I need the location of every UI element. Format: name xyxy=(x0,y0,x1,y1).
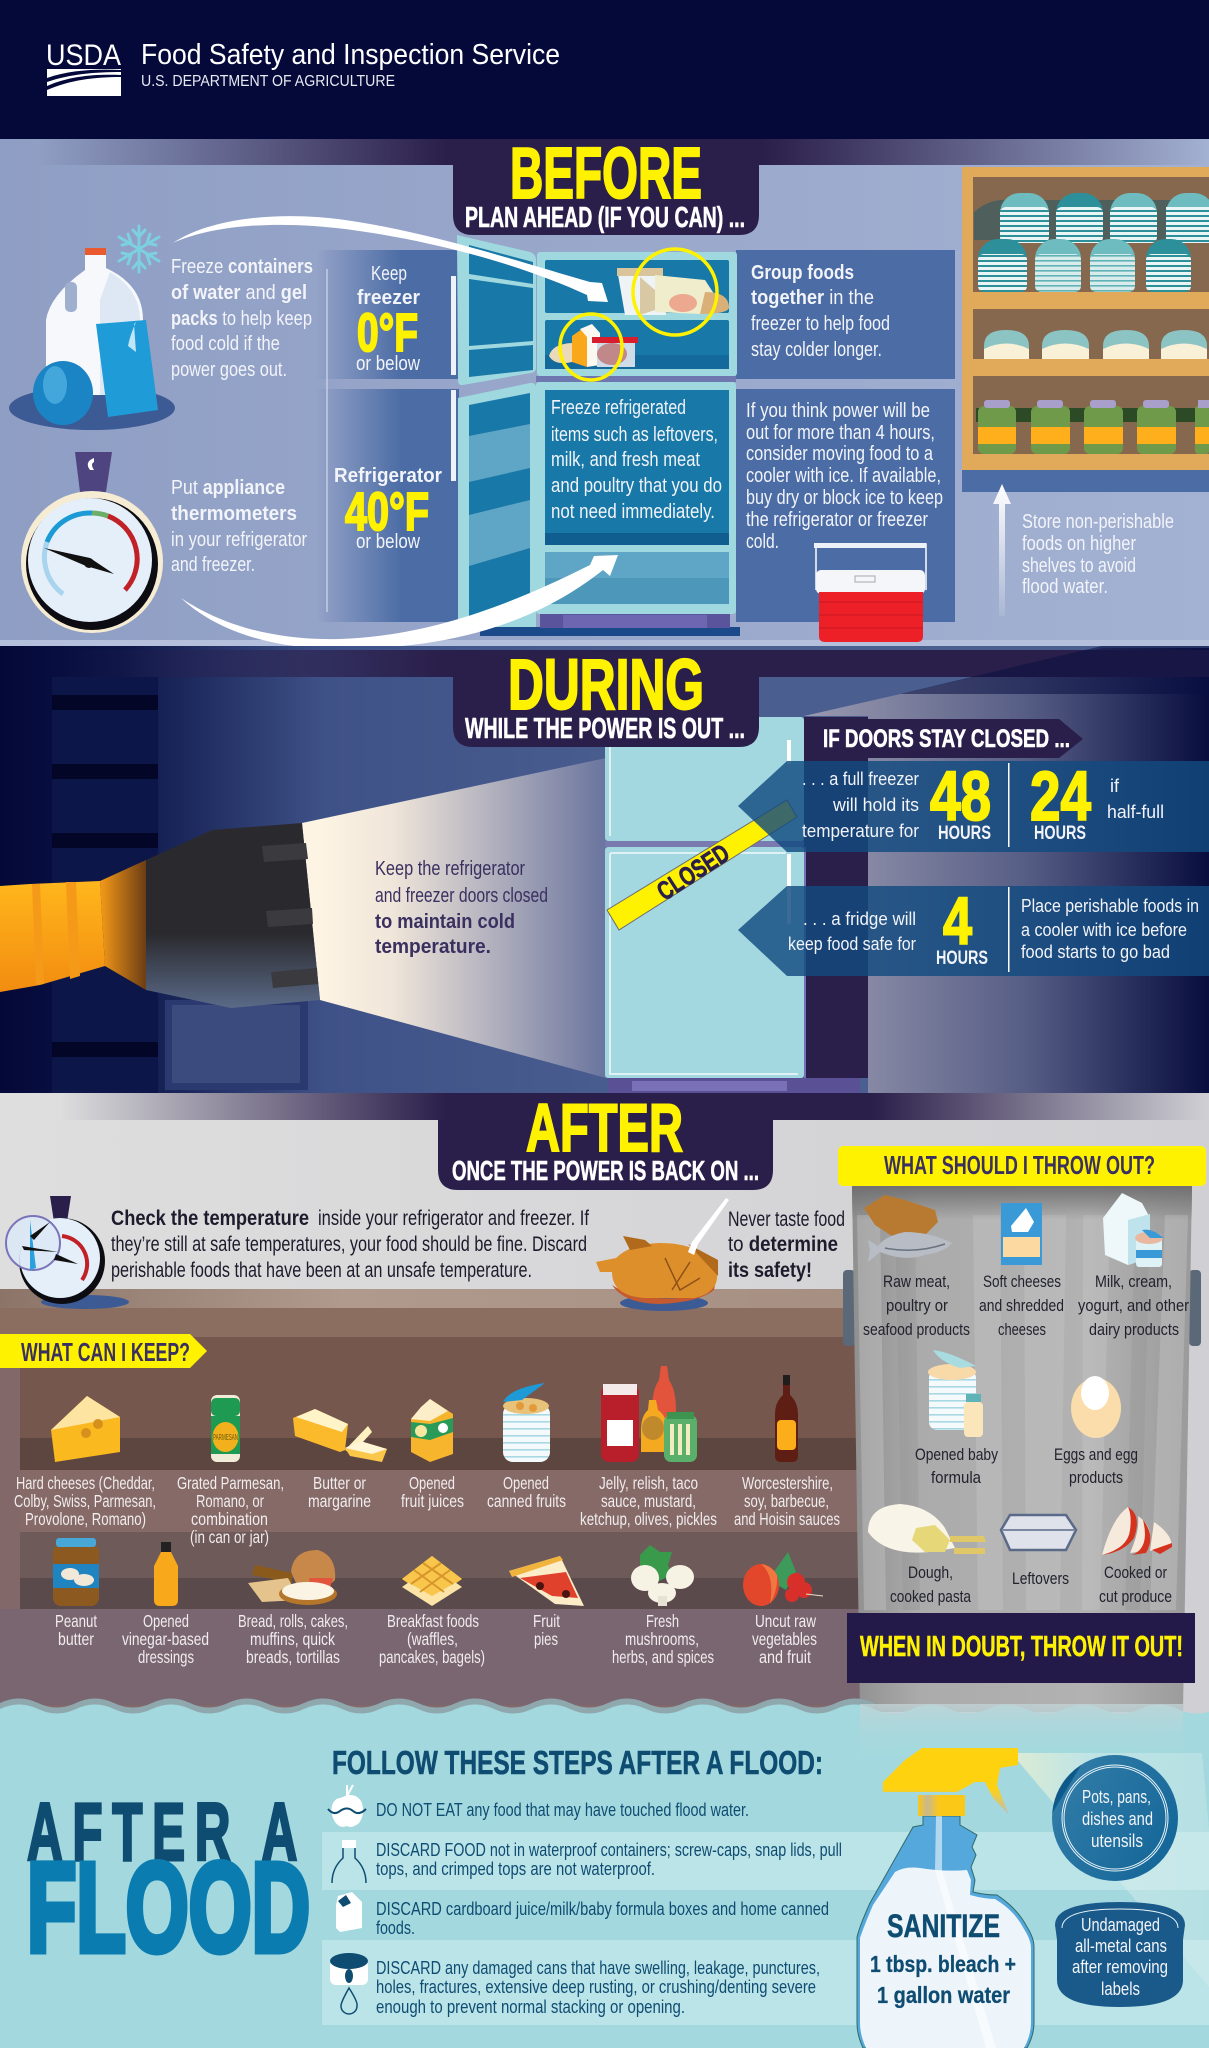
text: throw out food labels: Eggs and egg xyxy=(1054,1446,1138,1464)
text: throw out food labels: and shredded xyxy=(979,1297,1064,1315)
text: throw out food labels: Leftovers xyxy=(1012,1570,1069,1588)
agency name: Food Safety and Inspection Service xyxy=(141,39,560,71)
icon: leftovers container xyxy=(1001,1515,1076,1550)
title: after a flood: AFTER A xyxy=(27,1787,307,1878)
icon: leaking can xyxy=(330,1953,368,2014)
text: throw out food labels: seafood products xyxy=(863,1321,970,1339)
text: second row food labels: vegetables xyxy=(752,1629,817,1649)
callout: freezer hold times: HOURS xyxy=(1034,823,1086,844)
icon: closed refrigerator xyxy=(605,717,868,1093)
icon: flashlight xyxy=(0,823,320,1008)
icon: apple in water xyxy=(328,1785,366,1827)
USDA logo: USDA xyxy=(46,39,121,72)
icon: breads xyxy=(248,1550,337,1605)
freezer temperature panel: Keep xyxy=(371,263,407,285)
callout: fridge hold time: food starts to go bad xyxy=(1021,942,1170,962)
title: before: PLAN AHEAD (IF YOU CAN) ... xyxy=(465,202,745,234)
icon: baby formula xyxy=(928,1350,983,1437)
icon: cut produce xyxy=(1102,1507,1172,1555)
text: appliance thermometers: and freezer. xyxy=(171,554,255,576)
icon: milk carton and yogurt xyxy=(1103,1193,1164,1267)
text: throw out food labels: formula xyxy=(931,1469,982,1487)
text: first row food labels: Hard cheeses (Cheddar, xyxy=(16,1473,155,1493)
heading: follow these steps: FOLLOW THESE STEPS AFTER A FLOOD: xyxy=(332,1744,823,1781)
icon: condiment jars xyxy=(601,1366,697,1462)
icon: egg xyxy=(1071,1376,1121,1438)
icon: open refrigerator xyxy=(457,235,740,636)
badge: pots and pans: Pots, pans, xyxy=(1082,1787,1151,1807)
text: second row food labels: Fresh xyxy=(646,1611,679,1631)
icon: water jug, gel pack, snowflake xyxy=(9,226,175,430)
text: freeze refrigerated items: items such as leftovers, xyxy=(551,424,718,446)
text: first row food labels: Butter or xyxy=(313,1473,366,1493)
text: store non-perishable xyxy=(1022,511,1174,598)
light beam xyxy=(302,758,606,1078)
badge: metal cans xyxy=(1055,1902,1185,2007)
callout: freezer hold times xyxy=(738,757,1209,852)
text: second row food labels: muffins, quick xyxy=(250,1629,335,1649)
icon: appliance thermometer xyxy=(21,452,163,633)
icon: dressing bottle xyxy=(154,1542,178,1606)
freezer temperature panel: freezer xyxy=(357,287,420,309)
panel: group foods: Group foods xyxy=(751,262,854,284)
jars xyxy=(976,400,1209,454)
icon: cooler xyxy=(814,543,926,642)
text: first row food labels: ketchup, olives, pickles xyxy=(580,1509,717,1529)
text: first row food labels: margarine xyxy=(308,1491,371,1511)
icon: carton xyxy=(336,1892,362,1932)
closed tape: CLOSED xyxy=(651,838,735,906)
text: check the temperature: they’re still at safe temperatures, your food should be fine. Discard xyxy=(111,1233,587,1256)
text: first row food labels: canned fruits xyxy=(487,1491,566,1511)
title: after a flood: FLOOD xyxy=(27,1837,310,1978)
icon: shredded cheese bag xyxy=(1001,1203,1042,1265)
dark shelves xyxy=(52,677,308,1093)
header band xyxy=(0,0,1209,139)
text: throw out food labels: Cooked or xyxy=(1104,1564,1167,1582)
callout: fridge hold time: 4 xyxy=(943,884,972,959)
title: after a flood xyxy=(27,1787,310,1978)
text: first row food labels: soy, barbecue, xyxy=(744,1491,829,1511)
title: during xyxy=(453,646,759,747)
text: freeze containers: of water and gel xyxy=(171,282,307,304)
text: appliance thermometers: thermometers xyxy=(171,503,297,525)
arrow: move up xyxy=(993,484,1011,616)
text: discard cans: DISCARD any damaged cans that have swelling, leakage, punctures, xyxy=(376,1958,820,1978)
text: second row food labels: breads, tortillas xyxy=(246,1647,340,1667)
text: first row food labels: Provolone, Romano) xyxy=(25,1509,146,1529)
text: freeze refrigerated items xyxy=(551,397,722,523)
refrigerator temperature panel: Refrigerator xyxy=(334,465,442,487)
callout: freezer hold times: temperature for xyxy=(802,821,919,841)
title: before xyxy=(453,134,759,235)
text: never taste food: to determine xyxy=(728,1233,838,1256)
text: keep doors closed xyxy=(375,858,548,958)
text: throw out food labels: poultry or xyxy=(886,1297,948,1315)
text: second row food labels: Breakfast foods xyxy=(387,1611,479,1631)
USDA logo xyxy=(46,39,121,96)
badge: pots and pans xyxy=(1052,1755,1178,1881)
icon: thermometer with probe dial xyxy=(6,1196,129,1309)
text: discard food xyxy=(376,1840,842,1879)
text: first row food labels xyxy=(14,1473,840,1547)
text: discard cardboard xyxy=(376,1899,829,1938)
text: throw out food labels: cooked pasta xyxy=(890,1588,972,1606)
text: never taste food xyxy=(728,1208,845,1282)
shelves with food xyxy=(962,167,1209,492)
text: never taste food: Never taste food xyxy=(728,1208,845,1231)
text: second row food labels: Bread, rolls, cakes, xyxy=(238,1611,348,1631)
text: second row food labels: (waffles, xyxy=(407,1629,458,1649)
banner: what should I throw out xyxy=(838,1146,1206,1186)
panel: after xyxy=(0,1090,1209,1733)
banner: what can I keep xyxy=(0,1334,207,1368)
icon: fruit pie xyxy=(509,1556,584,1606)
text: second row food labels: Opened xyxy=(143,1611,189,1631)
badge: metal cans: all-metal cans xyxy=(1075,1936,1167,1956)
text: throw out food labels xyxy=(863,1273,1189,1606)
text: first row food labels: Opened xyxy=(503,1473,549,1493)
text: sanitize: 1 tbsp. bleach + xyxy=(870,1951,1016,1977)
freezer temperature panel: 0°F xyxy=(357,303,418,363)
icon: snowflake xyxy=(119,226,159,272)
text: discard food: tops, and crimped tops are not waterproof. xyxy=(376,1859,655,1879)
text: discard cans: enough to prevent normal stacking or opening. xyxy=(376,1997,685,2017)
text: first row food labels: Worcestershire, xyxy=(742,1473,833,1493)
text: freeze refrigerated items: milk, and fresh meat xyxy=(551,449,700,471)
trash can xyxy=(843,1185,1201,1712)
text: throw out food labels: Dough, xyxy=(908,1564,953,1582)
text: first row food labels: Grated Parmesan, xyxy=(177,1473,284,1493)
text: freeze containers: power goes out. xyxy=(171,359,287,381)
icon: bottle xyxy=(332,1840,366,1883)
callout: fridge hold time: keep food safe for xyxy=(788,934,916,954)
text: throw out food labels: yogurt, and other xyxy=(1078,1297,1189,1315)
banner: when in doubt xyxy=(847,1613,1195,1683)
panel: cooler advice: out for more than 4 hours, xyxy=(746,422,935,444)
panel: before xyxy=(0,134,1209,649)
text: throw out food labels: dairy products xyxy=(1089,1321,1179,1339)
panel: during xyxy=(0,646,1209,1093)
text: sanitize: 1 gallon water xyxy=(877,1982,1010,2008)
banner: what can I keep: WHAT CAN I KEEP? xyxy=(21,1337,190,1367)
panel: cooler advice: the refrigerator or freezer xyxy=(746,509,928,531)
arrow: to freezer xyxy=(173,216,608,302)
text: freeze containers: Freeze containers xyxy=(171,256,313,278)
badge: metal cans: Undamaged xyxy=(1081,1915,1160,1935)
text: first row food labels: combination xyxy=(191,1509,268,1529)
text: do not eat: DO NOT EAT any food that may have touched flood water. xyxy=(376,1800,749,1820)
text: second row food labels: vinegar-based xyxy=(122,1629,209,1649)
text: freeze containers: packs to help keep xyxy=(171,308,312,330)
icon: peanut butter jar xyxy=(53,1538,99,1606)
badge: pots and pans: dishes and xyxy=(1082,1809,1153,1829)
panel: cooler advice: consider moving food to a xyxy=(746,443,934,465)
callout: freezer hold times: will hold its xyxy=(832,795,919,815)
icon: parmesan shaker: PARMESAN xyxy=(213,1433,238,1442)
icon: opened can xyxy=(503,1383,550,1462)
panel: group foods: together in the xyxy=(751,287,874,309)
callout: fridge hold time xyxy=(738,884,1209,976)
icon: waffles xyxy=(402,1556,462,1606)
badge: metal cans: after removing xyxy=(1072,1957,1168,1977)
title: after: ONCE THE POWER IS BACK ON ... xyxy=(452,1155,759,1186)
text: second row food labels: mushrooms, xyxy=(625,1629,699,1649)
text: check the temperature: perishable foods that have been at an unsafe temperature. xyxy=(111,1259,532,1282)
plates xyxy=(974,193,1209,292)
text: appliance thermometers: in your refrigerator xyxy=(171,529,307,551)
text: freeze containers xyxy=(171,256,313,381)
callout: freezer hold times: if xyxy=(1110,776,1120,796)
spray mist xyxy=(1018,1753,1209,1987)
panel: group foods: freezer to help food xyxy=(751,313,890,335)
refrigerator temperature panel: or below xyxy=(356,531,420,553)
text: discard cardboard: DISCARD cardboard juice/milk/baby formula boxes and home canned xyxy=(376,1899,829,1919)
text: throw out food labels: Opened baby xyxy=(915,1446,999,1464)
text: second row food labels: Peanut xyxy=(55,1611,97,1631)
text: never taste food: its safety! xyxy=(728,1259,812,1282)
text: discard cans: holes, fractures, extensive deep rusting, or crushing/denting severe xyxy=(376,1977,816,1997)
title: after: AFTER xyxy=(526,1090,683,1166)
text: appliance thermometers: Put appliance xyxy=(171,477,285,499)
callout: freezer hold times: HOURS xyxy=(938,823,991,844)
arrow: to refrigerator xyxy=(181,555,618,649)
text: keep doors closed: Keep the refrigerator xyxy=(375,858,525,880)
text: store non-perishable: shelves to avoid xyxy=(1022,555,1136,577)
badge: metal cans: labels xyxy=(1101,1979,1140,1999)
icon: mushrooms and herbs xyxy=(631,1545,694,1606)
icon: juice carton xyxy=(411,1399,453,1462)
text: check the temperature: inside your refrigerator and freezer. If xyxy=(318,1207,589,1230)
closed tape xyxy=(607,800,797,930)
text: first row food labels: Romano, or xyxy=(196,1491,264,1511)
text: sanitize xyxy=(870,1908,1016,2008)
text: second row food labels: Uncut raw xyxy=(755,1611,816,1631)
callout: fridge hold time: . . . a fridge will xyxy=(803,909,916,929)
text: appliance thermometers xyxy=(171,477,307,576)
text: keep doors closed: to maintain cold xyxy=(375,911,515,933)
panel: cooler advice: cold. xyxy=(746,531,779,553)
text: first row food labels: fruit juices xyxy=(401,1491,464,1511)
counter and wall xyxy=(0,1289,860,1709)
icon: roast turkey and fork xyxy=(596,1198,729,1311)
text: keep doors closed: temperature. xyxy=(375,936,491,958)
icon: spray bottle xyxy=(857,1748,1034,2048)
icon: dough and pasta xyxy=(868,1504,986,1554)
text: store non-perishable: foods on higher xyxy=(1022,533,1136,555)
icon: vegetables and fruit xyxy=(743,1552,823,1606)
text: throw out food labels: products xyxy=(1069,1469,1123,1487)
callout: freezer hold times: 48 xyxy=(930,757,991,835)
icon: butter xyxy=(293,1409,387,1462)
icon: parmesan shaker xyxy=(211,1395,240,1462)
callout: freezer hold times: half-full xyxy=(1107,802,1164,822)
title: during: WHILE THE POWER IS OUT ... xyxy=(465,713,745,745)
text: second row food labels: pies xyxy=(534,1629,558,1649)
text: first row food labels: sauce, mustard, xyxy=(601,1491,696,1511)
panel: group foods: stay colder longer. xyxy=(751,339,882,361)
panel: cooler advice: If you think power will be xyxy=(746,400,930,422)
text: check the temperature: Check the temperature xyxy=(111,1207,309,1230)
title: after xyxy=(438,1090,773,1190)
callout: fridge hold time: a cooler with ice before xyxy=(1021,920,1187,940)
text: second row food labels: Fruit xyxy=(533,1611,560,1631)
callout: if doors stay closed xyxy=(804,719,1083,758)
panel: after a flood xyxy=(0,1698,1209,2048)
panel: cooler advice: buy dry or block ice to keep xyxy=(746,487,943,509)
text: keep doors closed: and freezer doors closed xyxy=(375,885,548,907)
text: second row food labels: pancakes, bagels) xyxy=(379,1647,485,1667)
title: during: DURING xyxy=(508,646,704,725)
text: throw out food labels: Soft cheeses xyxy=(983,1273,1061,1291)
text: first row food labels: (in can or jar) xyxy=(190,1527,269,1547)
text: freeze refrigerated items: and poultry that you do xyxy=(551,475,722,497)
text: first row food labels: and Hoisin sauces xyxy=(734,1509,840,1529)
text: check the temperature xyxy=(111,1207,589,1282)
text: freeze containers: food cold if the xyxy=(171,333,280,355)
highlight circles xyxy=(560,249,717,380)
text: second row food labels: and fruit xyxy=(759,1647,811,1667)
text: discard food: DISCARD FOOD not in waterproof containers; screw-caps, snap lids, pull xyxy=(376,1840,842,1860)
text: second row food labels: butter xyxy=(58,1629,94,1649)
panel: cooler advice xyxy=(736,389,955,622)
icon: raw poultry and fish xyxy=(864,1195,952,1262)
text: second row food labels: dressings xyxy=(138,1647,194,1667)
text: freeze refrigerated items: not need immediately. xyxy=(551,501,715,523)
text: throw out food labels: cut produce xyxy=(1099,1588,1172,1606)
bowls xyxy=(984,330,1207,359)
text: store non-perishable: flood water. xyxy=(1022,576,1108,598)
refrigerator temperature panel: 40°F xyxy=(345,482,429,542)
title: before: BEFORE xyxy=(510,134,702,214)
text: second row food labels xyxy=(55,1611,817,1667)
callout: if doors stay closed: IF DOORS STAY CLOSED ... xyxy=(823,725,1070,753)
text: first row food labels: Opened xyxy=(409,1473,455,1493)
icon: cheese wedge xyxy=(51,1396,120,1462)
text: throw out food labels: Raw meat, xyxy=(883,1273,950,1291)
text: freeze refrigerated items: Freeze refrigerated xyxy=(551,397,686,419)
text: discard cardboard: foods. xyxy=(376,1918,415,1938)
text: first row food labels: Jelly, relish, taco xyxy=(599,1473,698,1493)
icon: sauce bottle xyxy=(775,1375,798,1462)
text: first row food labels: Colby, Swiss, Parmesan, xyxy=(14,1491,156,1511)
freezer temperature panel xyxy=(316,250,459,379)
callout: fridge hold time: HOURS xyxy=(936,948,988,969)
icon: frozen food packages xyxy=(549,268,729,367)
text: throw out food labels: Milk, cream, xyxy=(1095,1273,1172,1291)
callout: freezer hold times: 24 xyxy=(1030,757,1091,835)
text: store non-perishable: Store non-perishable xyxy=(1022,511,1174,533)
freezer temperature panel: or below xyxy=(356,353,420,375)
badge: pots and pans: utensils xyxy=(1091,1831,1143,1851)
text: throw out food labels: cheeses xyxy=(998,1321,1046,1339)
panel: cooler advice: cooler with ice. If available, xyxy=(746,465,941,487)
refrigerator temperature panel xyxy=(316,389,459,622)
department name: U.S. DEPARTMENT OF AGRICULTURE xyxy=(141,73,395,90)
text: sanitize: SANITIZE xyxy=(887,1908,1000,1944)
callout: freezer hold times: . . . a full freezer xyxy=(802,769,919,789)
text: discard cans xyxy=(376,1958,820,2017)
panel: group foods xyxy=(736,250,955,379)
text: second row food labels: herbs, and spices xyxy=(612,1647,714,1667)
